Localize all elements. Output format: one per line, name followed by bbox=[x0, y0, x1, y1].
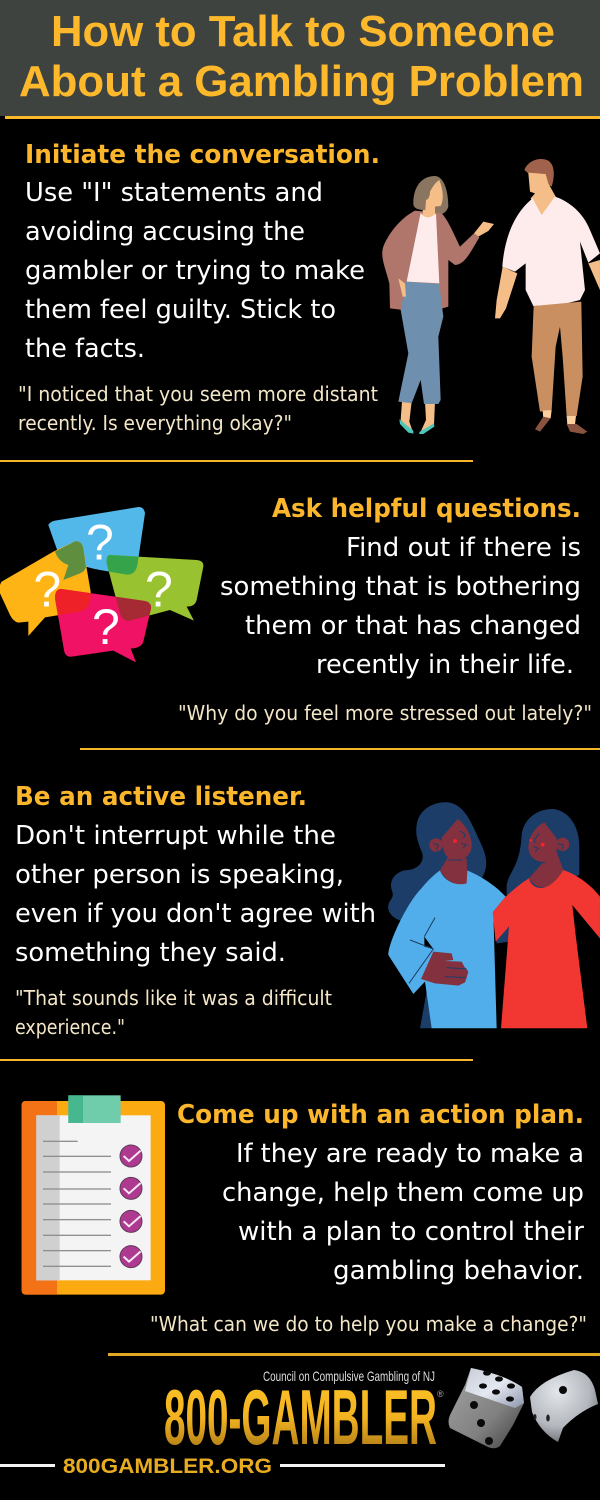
body text: them or that has changed bbox=[245, 611, 581, 641]
body text: avoiding accusing the bbox=[25, 217, 305, 247]
body text: recently in their life. bbox=[316, 650, 574, 680]
example quote: experience." bbox=[15, 1015, 125, 1039]
body text: with a plan to control their bbox=[238, 1217, 584, 1247]
body text: Don't interrupt while the bbox=[15, 821, 336, 851]
heading: Come up with an action plan. bbox=[177, 1100, 584, 1130]
registered mark: ® bbox=[437, 1389, 444, 1399]
panel: ask helpful questions bbox=[0, 494, 592, 725]
example quote: recently. Is everything okay?" bbox=[18, 411, 292, 435]
icon: clipboard checklist bbox=[22, 1095, 165, 1295]
example quote bbox=[15, 986, 332, 1039]
icon: question speech bubbles bbox=[0, 507, 203, 662]
divider bbox=[80, 748, 600, 750]
icon: dice bbox=[448, 1368, 598, 1448]
body text: something that is bothering bbox=[220, 572, 581, 602]
icon: question speech bubbles: ? bbox=[33, 562, 61, 618]
body text: gambler or trying to make bbox=[25, 256, 365, 286]
icon: question speech bubbles: ? bbox=[86, 514, 114, 570]
heading: Initiate the conversation. bbox=[25, 140, 380, 170]
body text: If they are ready to make a bbox=[236, 1139, 584, 1169]
body text: even if you don't agree with bbox=[15, 899, 376, 929]
icon: question speech bubbles: ? bbox=[92, 599, 120, 655]
body text: them feel guilty. Stick to bbox=[25, 295, 336, 325]
icon: two people talking bbox=[382, 159, 600, 434]
body text: Find out if there is bbox=[346, 533, 581, 563]
panel: come up with an action plan bbox=[22, 1095, 587, 1336]
panel: initiate the conversation bbox=[18, 140, 600, 435]
icon: two women supporting each other bbox=[388, 802, 600, 1028]
title banner bbox=[0, 0, 600, 119]
title banner: How to Talk to Someone bbox=[51, 7, 555, 56]
heading: Ask helpful questions. bbox=[272, 494, 581, 524]
body text bbox=[15, 821, 376, 968]
divider bbox=[0, 460, 473, 462]
example quote: "I noticed that you seem more distant bbox=[18, 382, 378, 406]
body text bbox=[220, 533, 581, 680]
body text: other person is speaking, bbox=[15, 860, 344, 890]
footer website: 800GAMBLER.ORG bbox=[63, 1455, 272, 1478]
icon: question speech bubbles: ? bbox=[145, 562, 173, 618]
body text: the facts. bbox=[25, 334, 145, 364]
body text: change, help them come up bbox=[222, 1178, 584, 1208]
body text: Use "I" statements and bbox=[25, 178, 323, 208]
divider bbox=[0, 1059, 473, 1061]
council name: Council on Compulsive Gambling of NJ bbox=[263, 1368, 435, 1384]
body text: gambling behavior. bbox=[333, 1256, 584, 1286]
divider bbox=[108, 1353, 600, 1356]
body text bbox=[25, 178, 365, 364]
heading: Be an active listener. bbox=[15, 782, 307, 812]
footer logo block bbox=[164, 1368, 598, 1461]
body text bbox=[222, 1139, 584, 1286]
title banner: About a Gambling Problem bbox=[19, 57, 584, 106]
footer website bbox=[0, 1455, 445, 1478]
body text: something they said. bbox=[15, 938, 286, 968]
example quote bbox=[18, 382, 378, 435]
panel: be an active listener bbox=[15, 782, 600, 1039]
example quote: "That sounds like it was a difficult bbox=[15, 986, 332, 1010]
